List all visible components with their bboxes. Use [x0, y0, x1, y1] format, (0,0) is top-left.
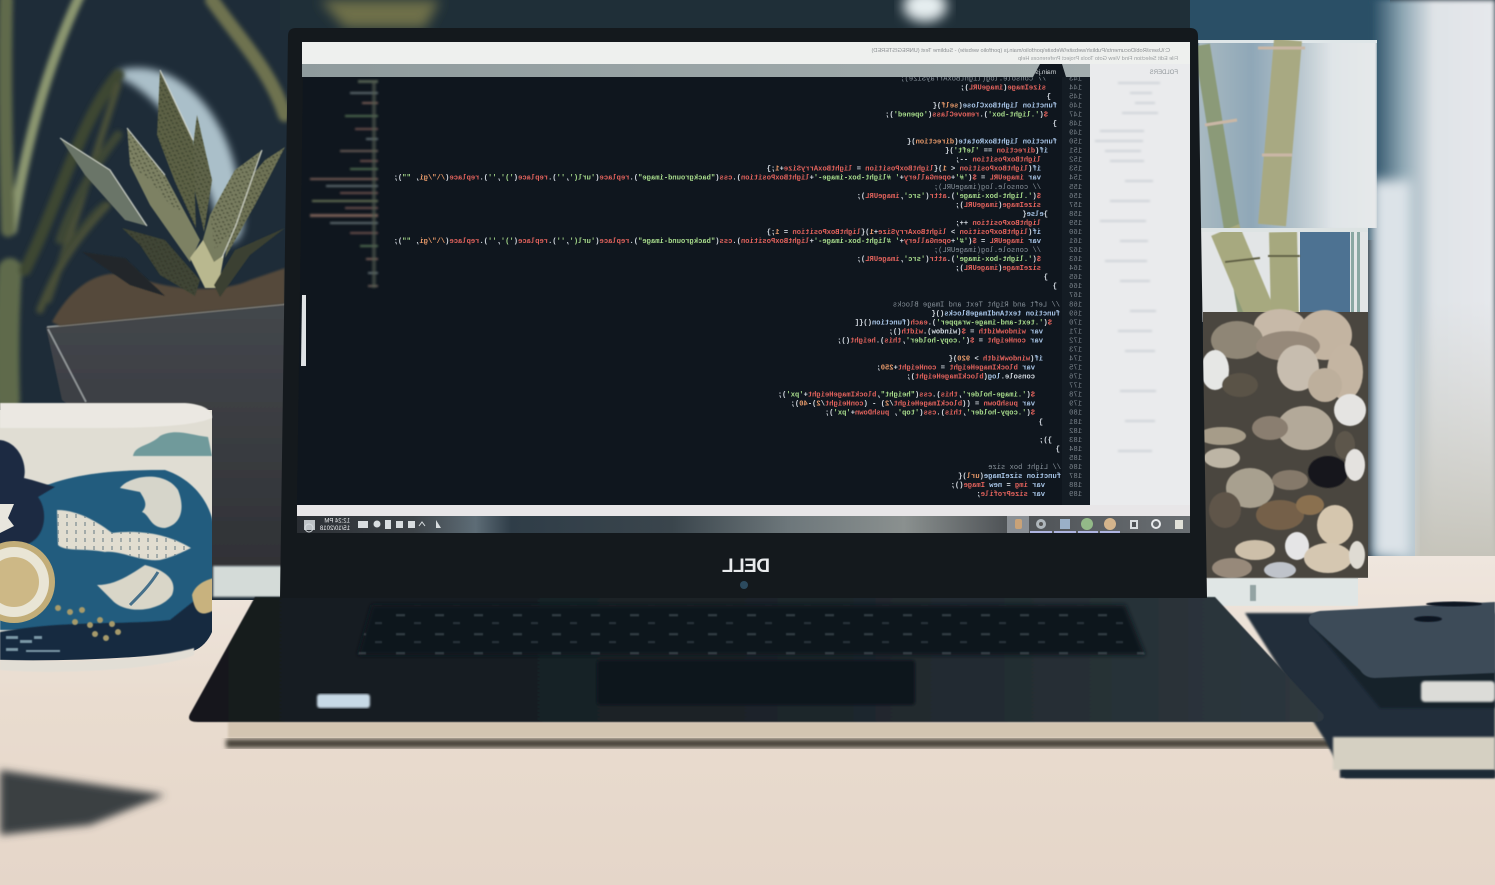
title bar text: C:\Users\Rob\Documents\Publish\website\Website\portfolio\main.js (portfolio website) - Sublime Text (UNREGISTERED): [871, 48, 1170, 54]
lid bezel: [280, 28, 1207, 598]
code lines (mirrored): }: [1047, 93, 1051, 101]
table top: [0, 556, 1495, 885]
code lines (mirrored): var sizeProfile;: [976, 491, 1045, 499]
code lines (mirrored): sizeImage(imageURL);: [960, 84, 1046, 92]
code lines (mirrored): function sizeImage(url){: [958, 473, 1061, 481]
succulent leaves: [60, 70, 285, 297]
code lines (mirrored): 175: [1069, 364, 1082, 372]
scrollbar: [301, 295, 306, 366]
glass pot with succulent: [46, 70, 285, 597]
code lines (mirrored): var blockImageHeight = conHeight+250;: [876, 364, 1035, 372]
tray icons: [304, 520, 441, 532]
code lines (mirrored): var imageURL = $('#'+openGallery+' #light-box-image-'+lightBoxPosition).css("background-image").replace('url(','').replace(')','').replace(/\"/gi, "");: [394, 175, 1041, 183]
laptop: [189, 28, 1324, 722]
DELL logo (mirrored): DELL: [722, 556, 770, 577]
code lines (mirrored): 174: [1069, 356, 1082, 364]
mug rim: [0, 403, 212, 428]
code lines (mirrored): console.log(blockImageHeight);: [906, 374, 1035, 382]
glass base: [1200, 578, 1370, 606]
code lines (mirrored): 189: [1069, 491, 1082, 499]
bamboo stalks: [1202, 40, 1305, 318]
code lines (mirrored): 162: [1069, 247, 1082, 255]
code lines (mirrored): }else{: [1022, 211, 1048, 219]
code lines (mirrored): 177: [1069, 383, 1082, 391]
sidebar panel: [1090, 64, 1190, 505]
code lines (mirrored): 152: [1069, 157, 1082, 165]
pot: [46, 304, 285, 566]
code lines (mirrored): $('.light-box').removeClass('opened');: [885, 112, 1048, 120]
code lines (mirrored): [394, 75, 1082, 499]
code lines (mirrored): function lightBoxClose(self){: [933, 102, 1057, 110]
taskbar: 15/10/2018: [319, 526, 350, 532]
code editor background: [297, 77, 1090, 505]
keyboard: [358, 605, 1145, 655]
code lines (mirrored): if(lightBoxPosition > lightBoxArrySize+1){lightBoxPosition = 1;}: [767, 229, 1041, 237]
code lines (mirrored): function lightBoxRotate(direction){: [907, 138, 1057, 146]
code lines (mirrored): 171: [1069, 328, 1082, 336]
code lines (mirrored): 144: [1069, 84, 1082, 92]
code lines (mirrored): 188: [1069, 482, 1082, 490]
code lines (mirrored): sizeImage(imageURL);: [955, 265, 1041, 273]
code lines (mirrored): 164: [1069, 265, 1082, 273]
code lines (mirrored): $('.copy-holder',this).css('top', pushDown+'px');: [825, 410, 1035, 418]
code lines (mirrored): // Light box size: [988, 464, 1061, 472]
code lines (mirrored): 165: [1069, 274, 1082, 282]
code lines (mirrored): 176: [1069, 374, 1082, 382]
taskbar clock: 12:24 PM: [324, 518, 350, 524]
touchpad: [597, 660, 915, 705]
code lines (mirrored): 183: [1069, 437, 1082, 445]
code lines (mirrored): 187: [1069, 473, 1082, 481]
gold spot: [192, 578, 214, 614]
vase with bamboo and stones: [1198, 40, 1377, 606]
leaf edge highlights: [60, 70, 262, 258]
code lines (mirrored): 154: [1069, 175, 1082, 183]
bird lower wing: [97, 565, 173, 610]
code lines (mirrored): var img = new Image();: [951, 482, 1045, 490]
code lines (mirrored): 182: [1069, 428, 1082, 436]
code lines (mirrored): 166: [1069, 283, 1082, 291]
code lines (mirrored): 151: [1069, 148, 1082, 156]
code lines (mirrored): $('.text-and-image-wrapper').each(function(){[: [855, 319, 1052, 327]
cloud: [133, 432, 212, 456]
code lines (mirrored): }: [1039, 419, 1043, 427]
blue band: [0, 470, 214, 630]
code lines (mirrored): // console.log(lightBoxArraySize);: [900, 75, 1046, 83]
code lines (mirrored): 181: [1069, 419, 1082, 427]
code lines (mirrored): 155: [1069, 184, 1082, 192]
dark bird: [0, 440, 55, 548]
code lines (mirrored): 163: [1069, 256, 1082, 264]
code lines (mirrored): // Left and Right Text and Image Blocks: [893, 301, 1060, 309]
bird body and wing: [57, 510, 191, 560]
tab label: main.js: [1035, 69, 1056, 76]
code lines (mirrored): 180: [1069, 410, 1082, 418]
code lines (mirrored): // console.log(imageURL);: [934, 247, 1041, 255]
code lines (mirrored): 149: [1069, 130, 1082, 138]
code lines (mirrored): 184: [1069, 446, 1082, 454]
laptop base with keyboard deck: [189, 597, 1324, 722]
code lines (mirrored): 145: [1069, 93, 1082, 101]
code lines (mirrored): 178: [1069, 392, 1082, 400]
status bar: [297, 505, 1190, 516]
leaf speckles: [122, 70, 285, 296]
notebook: [1245, 613, 1495, 778]
phone: [1308, 602, 1495, 708]
coffee mug: [0, 403, 214, 675]
code lines (mirrored): 148: [1069, 120, 1082, 128]
pinned apps: [1015, 518, 1183, 533]
webcam: [740, 581, 748, 589]
code lines (mirrored): // console.log(imageURL);: [934, 184, 1041, 192]
code lines (mirrored): 153: [1069, 166, 1082, 174]
code lines (mirrored): if(direction == 'left'){: [945, 148, 1048, 156]
code lines (mirrored): $('.light-box-image').attr('src',imageURL);: [857, 193, 1041, 201]
code lines (mirrored): 169: [1069, 310, 1082, 318]
navy base: [0, 601, 212, 660]
stone mass: [1203, 312, 1368, 580]
code lines (mirrored): 160: [1069, 229, 1082, 237]
code lines (mirrored): 143: [1069, 75, 1082, 83]
bird upper wing: [120, 477, 182, 528]
code lines (mirrored): 179: [1069, 401, 1082, 409]
speckled base: [55, 605, 121, 641]
code lines (mirrored): 147: [1069, 112, 1082, 120]
code lines (mirrored): 146: [1069, 102, 1082, 110]
code lines (mirrored): }: [1053, 283, 1057, 291]
code lines (mirrored): 172: [1069, 337, 1082, 345]
gold sun: [0, 541, 55, 623]
sticker: [317, 694, 370, 708]
frosted upper glass: [1198, 40, 1377, 230]
code lines (mirrored): 185: [1069, 455, 1082, 463]
minimap: [310, 80, 378, 288]
code lines (mirrored): $('.image-holder',this).css("height",blockImageHeight+'px');: [778, 392, 1035, 400]
laptop base shadow: [226, 722, 1336, 748]
blurred object on table, bottom left: [0, 770, 165, 835]
taskbar: [297, 516, 1190, 533]
lower water section: [1200, 232, 1368, 322]
code lines (mirrored): sizeImage(imageURL);: [955, 202, 1041, 210]
code lines (mirrored): 170: [1069, 319, 1082, 327]
code lines (mirrored): $('.light-box-image').attr('src',imageURL);: [857, 256, 1041, 264]
code lines (mirrored): 168: [1069, 301, 1082, 309]
code lines (mirrored): var conHeight = $('.copy-holder',this).height();: [837, 337, 1043, 345]
code lines (mirrored): 161: [1069, 238, 1082, 246]
soil: [52, 268, 285, 326]
code lines (mirrored): }: [1053, 120, 1057, 128]
sidebar panel: FOLDERS: [1150, 70, 1178, 76]
code lines (mirrored): 167: [1069, 292, 1082, 300]
code lines (mirrored): var pushDown = ((blockImageHeight/2) - (conHeight/2)-40);: [791, 401, 1035, 409]
mug foot: [0, 648, 194, 672]
code lines (mirrored): }: [1044, 274, 1048, 282]
code lines (mirrored): lightBoxPosition --;: [955, 157, 1041, 165]
code lines (mirrored): var imageURL = $('#'+openGallery+' #light-box-image-'+lightBoxPosition).css("background-image").replace('url(','').replace(')','').replace(/\"/gi, "");: [394, 238, 1041, 246]
display: [297, 42, 1190, 533]
code lines (mirrored): }: [1056, 446, 1060, 454]
code lines (mirrored): 159: [1069, 220, 1082, 228]
menu text: File Edit Selection Find View Goto Tools Project Preferences Help: [1018, 56, 1178, 62]
code lines (mirrored): if(windowWidth > 920){: [949, 356, 1043, 364]
code lines (mirrored): });: [1039, 437, 1052, 445]
code lines (mirrored): 186: [1069, 464, 1082, 472]
code lines (mirrored): 157: [1069, 202, 1082, 210]
code lines (mirrored): var windowWidth = $(window).width();: [889, 328, 1043, 336]
code lines (mirrored): 173: [1069, 346, 1082, 354]
code lines (mirrored): lightBoxPosition ++;: [955, 220, 1041, 228]
background plant leaves: [5, 0, 285, 400]
code lines (mirrored): function textAndImageBlocks(){: [931, 310, 1060, 318]
code lines (mirrored): 150: [1069, 138, 1082, 146]
code lines (mirrored): 158: [1069, 211, 1082, 219]
code lines (mirrored): if(lightBoxPosition < 1){lightBoxPosition = lightBoxArrySize+1;}: [767, 166, 1041, 174]
glass foot: [213, 566, 282, 597]
code lines (mirrored): 156: [1069, 193, 1082, 201]
